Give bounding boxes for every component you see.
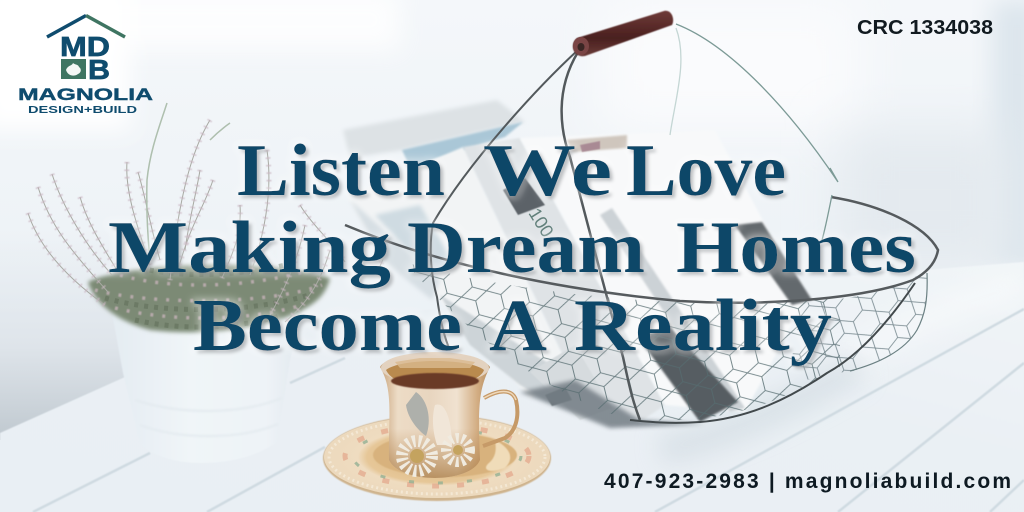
plant pot	[112, 300, 305, 463]
basket rim	[345, 197, 938, 303]
headline line 1	[237, 130, 786, 212]
headline line 2: Homes	[676, 207, 916, 289]
right white book	[520, 130, 805, 412]
cup leaf and daisies	[406, 392, 429, 436]
logo tagline: DESIGN+BUILD	[28, 104, 138, 116]
handle grip	[573, 11, 673, 56]
logo roof	[47, 16, 125, 37]
dark book bands	[735, 222, 812, 305]
chicken wire mesh	[412, 264, 840, 421]
headline line 2	[108, 207, 916, 289]
headline line 3: Become	[193, 285, 462, 367]
license number: CRC 1334038	[857, 17, 993, 39]
heather plant	[28, 103, 395, 332]
headline line 3: A	[489, 285, 547, 367]
headline line 3	[193, 285, 832, 367]
right mesh wing	[792, 276, 926, 380]
spine label: 100	[525, 205, 557, 241]
contact line: 407-923-2983 | magnoliabuild.com	[604, 470, 1011, 493]
white table with planks	[0, 262, 1024, 512]
gold teacup	[380, 352, 517, 478]
middle spine book	[463, 138, 665, 422]
left book, patterned cover	[347, 147, 575, 398]
books in basket	[343, 100, 812, 428]
wire basket	[345, 11, 938, 430]
headline line 1: We	[483, 130, 612, 212]
logo letters MD: MD	[60, 31, 110, 62]
logo letter B: B	[88, 54, 110, 85]
basket handle wires	[431, 50, 578, 350]
headline	[108, 130, 916, 367]
shadow beneath books	[520, 380, 705, 428]
logo wordmark: MAGNOLIA	[18, 85, 153, 104]
tea saucer	[323, 415, 551, 501]
logo magnolia tile	[61, 59, 86, 79]
headline line 1: Love	[626, 130, 786, 212]
headline line 2: Dream	[407, 207, 645, 289]
headline line 2: Making	[108, 207, 391, 289]
blurred back book	[343, 100, 525, 158]
company logo	[18, 16, 153, 116]
basket base wire	[630, 283, 915, 423]
headline line 1: Listen	[237, 130, 445, 212]
headline line 3: Reality	[574, 285, 832, 367]
